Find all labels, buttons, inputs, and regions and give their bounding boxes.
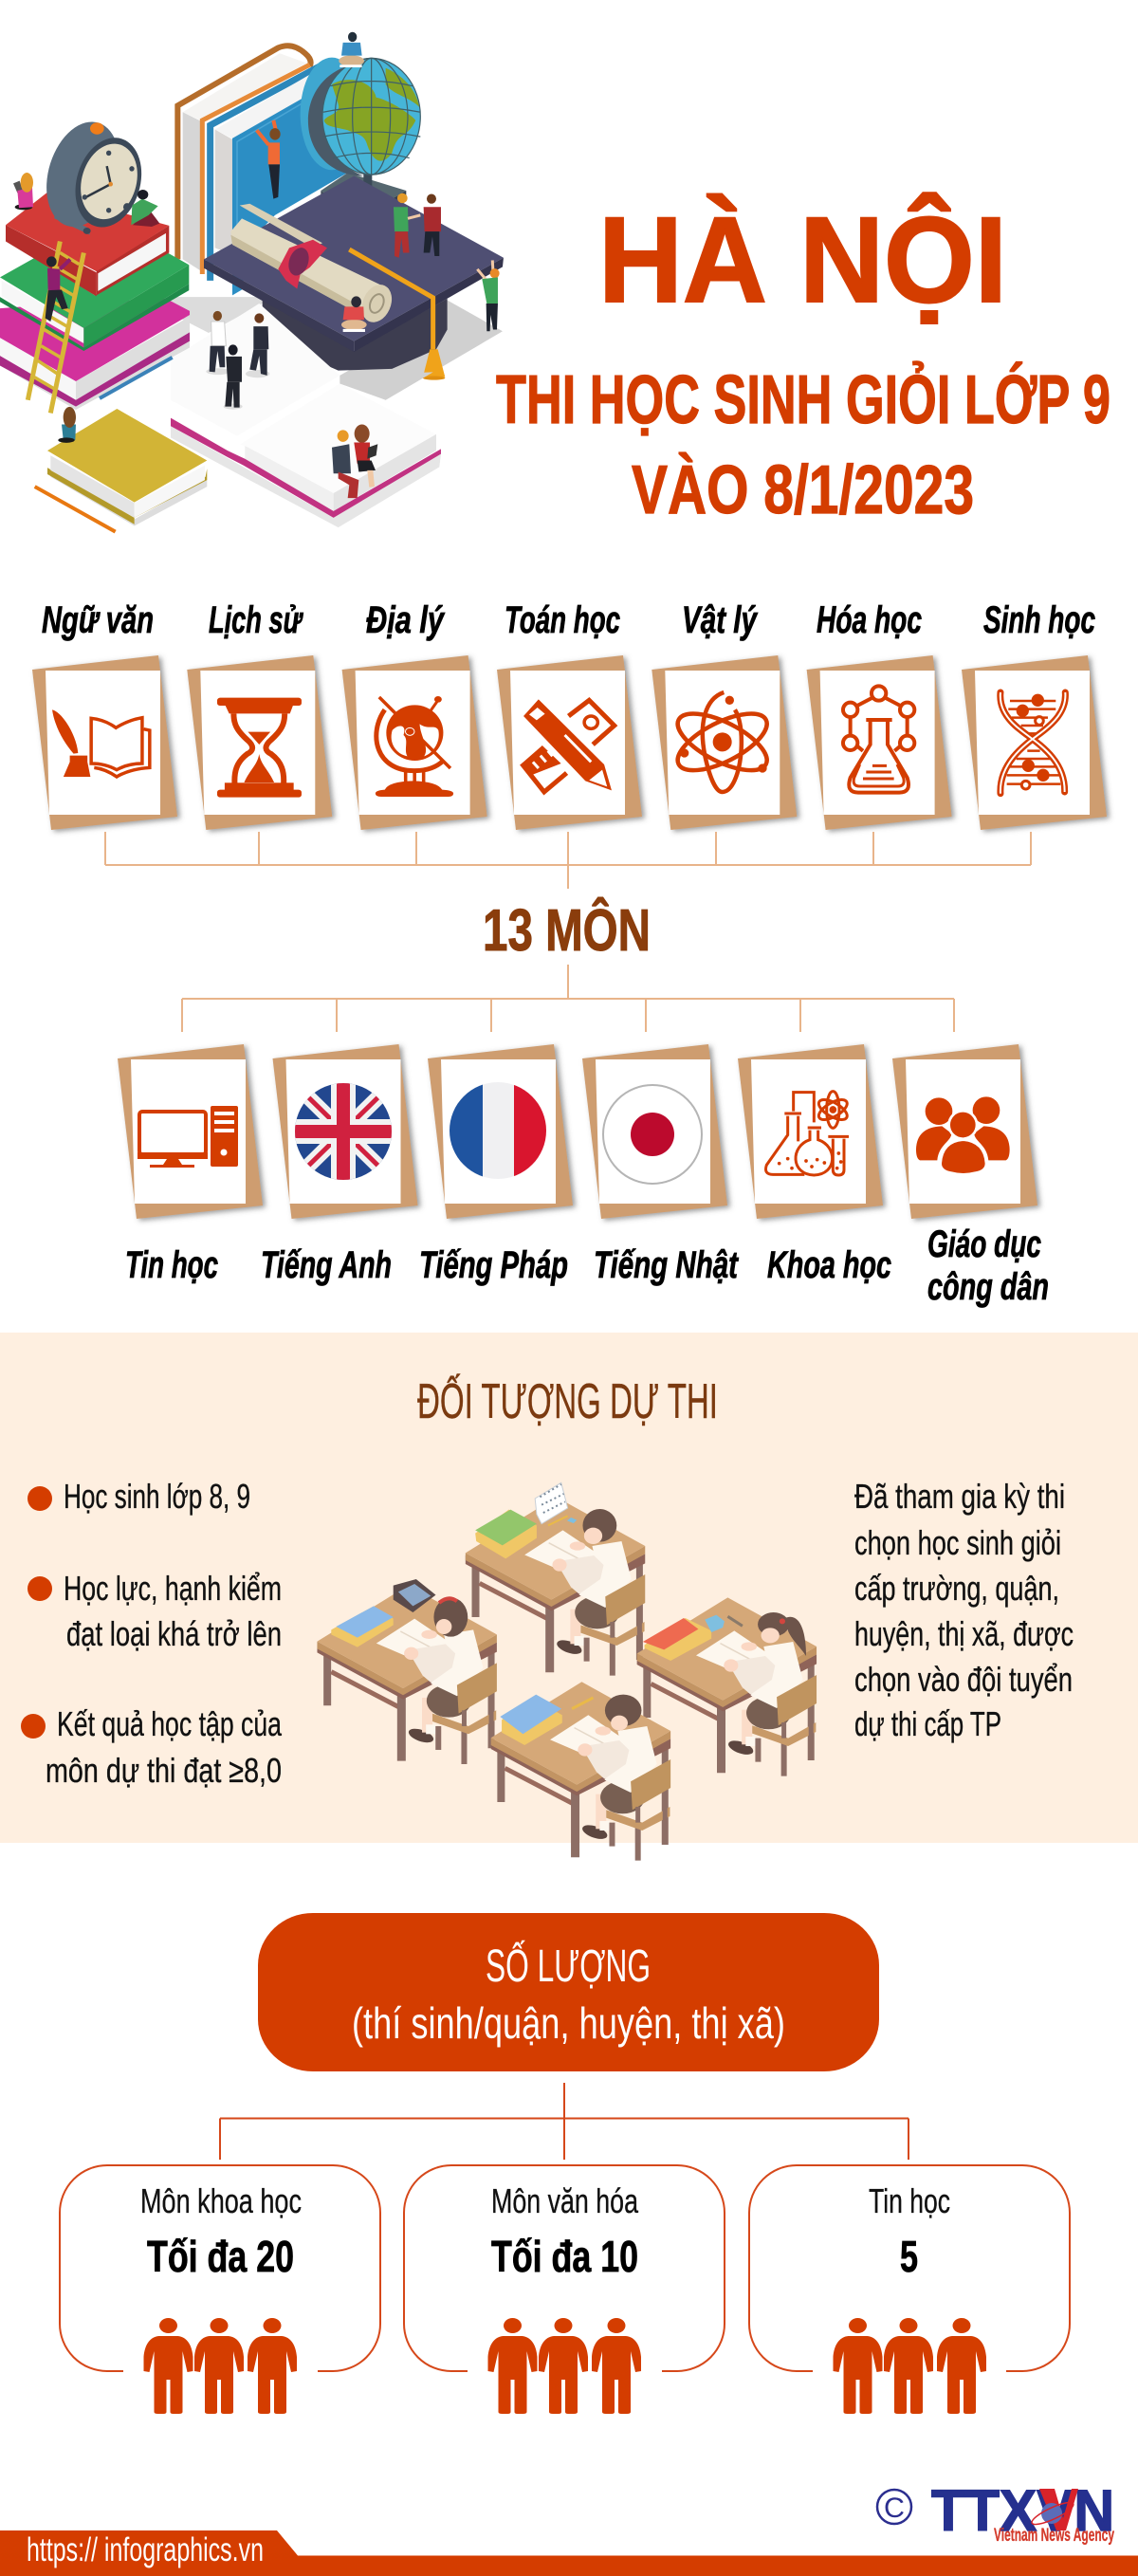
orange pencil <box>35 487 116 532</box>
bullet: grade <box>28 1477 250 1516</box>
desk: left student <box>317 1579 497 1764</box>
text block: selection criteria: Đã tham gia kỳ thi <box>854 1477 1065 1516</box>
icon: pencil and ruler <box>522 699 615 792</box>
subject labels: first row: Vật lý <box>682 599 758 641</box>
heading: 13 MÔN: 13 MÔN <box>483 898 651 964</box>
illustration: students at desks <box>317 1482 817 1861</box>
climber <box>46 256 57 267</box>
desk: back student <box>466 1482 645 1676</box>
icon: science flasks <box>765 1092 850 1175</box>
icons: science flasks and people <box>765 1092 1010 1175</box>
subject labels: second row: Tiếng Nhật <box>594 1244 739 1286</box>
girl on yellow book <box>62 425 76 440</box>
subject labels: second row: Tin học <box>125 1244 218 1286</box>
pencils <box>100 358 173 398</box>
panel: đối tượng dự thi <box>0 1333 1138 1843</box>
seated boy <box>133 209 159 227</box>
subject cards: first row <box>32 655 1107 830</box>
subject labels: second row: công dân <box>927 1266 1049 1308</box>
bullet: study results <box>21 1704 283 1790</box>
subject labels: first row: Ngữ văn <box>42 599 154 641</box>
subject labels: second row: Khoa học <box>767 1244 891 1286</box>
logo: TTXVN: TTXVN <box>931 2478 1114 2543</box>
desk: right student <box>637 1597 817 1776</box>
bullet: academic and conduct <box>28 1569 282 1653</box>
bullet: study results: Kết quả học tập của <box>57 1704 283 1743</box>
bullet: study results: môn dự thi đạt ≥8,0 <box>46 1751 282 1790</box>
box: môn văn hóa: Môn văn hóa <box>491 2181 639 2220</box>
icon: atom <box>670 692 775 792</box>
diploma scroll <box>240 204 322 248</box>
magenta book <box>0 341 190 410</box>
subject labels: second row: Tiếng Pháp <box>419 1244 568 1286</box>
icon: three people <box>833 2318 986 2414</box>
icon: Japanese flag <box>603 1085 702 1184</box>
box: môn văn hóa <box>404 2165 725 2414</box>
subject labels: first row <box>42 599 1095 641</box>
subject labels: first row: Lịch sử <box>209 599 303 641</box>
title: HÀ NỘI: HÀ NỘI <box>598 193 1007 328</box>
subject labels: second row <box>125 1224 1049 1308</box>
footer bar <box>0 2530 1138 2576</box>
icon: computer <box>138 1106 238 1168</box>
footer url: https:// infographics.vn <box>27 2531 264 2568</box>
text block: selection criteria: chọn vào đội tuyển <box>854 1660 1073 1699</box>
icon: French flag <box>450 1082 547 1179</box>
illustration: standing books, globe, cap and scroll <box>171 32 504 527</box>
subject labels: first row: Toán học <box>505 599 620 641</box>
box: môn văn hóa: Tối đa 10 <box>491 2232 638 2281</box>
banner: số lượng: (thí sinh/quận, huyện, thị xã) <box>352 1998 785 2048</box>
text block: selection criteria: dự thi cấp TP <box>854 1704 1001 1743</box>
ladder <box>28 241 83 413</box>
banner: số lượng <box>258 1913 879 2071</box>
connector: banner to boxes <box>220 2083 909 2160</box>
students on cap <box>397 193 408 203</box>
box: môn khoa học: Tối đa 20 <box>147 2232 294 2281</box>
banner: số lượng: SỐ LƯỢNG <box>486 1940 651 1992</box>
yellow book <box>50 472 207 525</box>
subject labels: second row: Giáo dục <box>927 1224 1041 1265</box>
box: môn khoa học: Môn khoa học <box>140 2181 302 2220</box>
icons: first row, traced on a shared grid <box>52 696 615 798</box>
girl with tablet <box>13 181 23 193</box>
text block: selection criteria <box>854 1477 1074 1743</box>
text block: selection criteria: cấp trường, quận, <box>854 1569 1059 1608</box>
box: môn khoa học <box>60 2165 380 2414</box>
subject labels: first row: Địa lý <box>366 599 445 641</box>
bullet: academic and conduct: Học lực, hạnh kiểm <box>64 1569 282 1608</box>
heading: đối tượng dự thi: ĐỐI TƯỢNG DỰ THI <box>417 1373 718 1429</box>
bullet: academic and conduct: đạt loại khá trở lên <box>66 1614 282 1653</box>
clock <box>54 211 90 235</box>
hero illustration: books, globe and graduation cap <box>0 32 504 532</box>
icon: book and quill <box>52 709 150 777</box>
subject labels: first row: Hóa học <box>817 599 922 641</box>
text block: selection criteria: chọn học sinh giỏi <box>854 1523 1061 1562</box>
connector: 13 subjects to second row <box>182 965 954 1032</box>
icons: atom, flask and DNA <box>670 686 1065 794</box>
logo: TTXVN: C <box>884 2493 905 2524</box>
icon: group of people <box>916 1096 1010 1174</box>
illustration: book stacks, clock, ladder and climbers <box>0 112 207 532</box>
red book <box>6 225 97 296</box>
box: tin học <box>749 2165 1070 2414</box>
subject labels: second row: Tiếng Anh <box>261 1244 392 1286</box>
icon: flask and molecule <box>843 686 914 793</box>
icon: three people <box>487 2318 641 2414</box>
box: tin học: Tin học <box>869 2181 950 2220</box>
connector: first row to 13 subjects <box>105 832 1031 889</box>
desk: front student <box>491 1682 670 1861</box>
icon: UK flag <box>294 1083 393 1180</box>
open book on the floor <box>171 304 340 436</box>
graduation cap <box>263 299 448 371</box>
icon: three people <box>144 2318 297 2414</box>
globe stand <box>321 173 406 215</box>
couple reading <box>338 430 349 442</box>
icon: globe <box>376 696 453 797</box>
subject cards: second row <box>118 1044 1037 1219</box>
box: tin học: 5 <box>900 2232 918 2281</box>
icon: hourglass <box>217 698 302 798</box>
businessmen <box>206 368 230 375</box>
green book <box>0 284 189 351</box>
bullet: grade: Học sinh lớp 8, 9 <box>64 1477 250 1516</box>
subtitle line 2: VÀO 8/1/2023 <box>632 452 974 528</box>
icon: DNA helix <box>1000 692 1065 794</box>
